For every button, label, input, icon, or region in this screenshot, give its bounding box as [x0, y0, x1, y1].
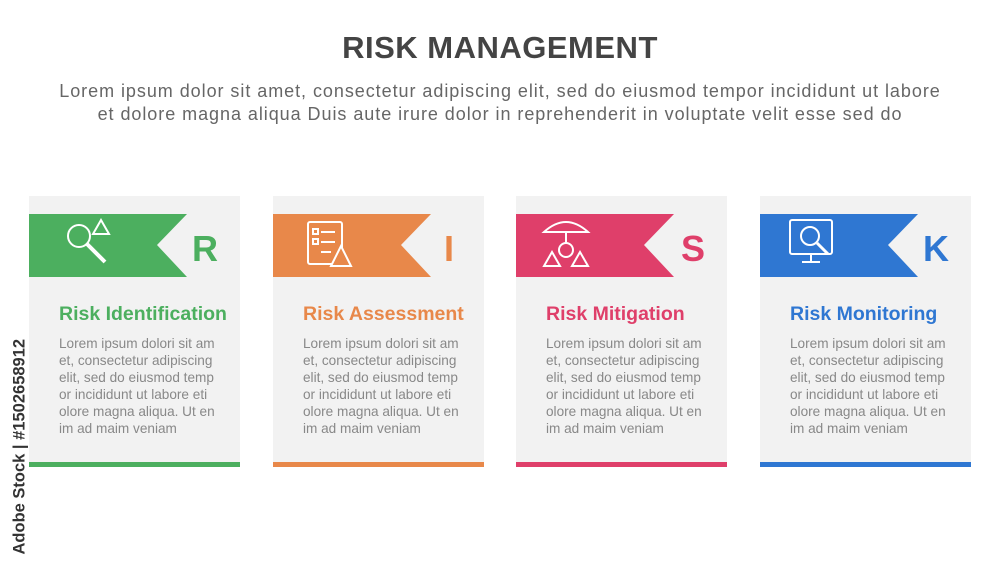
text: or incididunt ut labore eti [303, 387, 451, 402]
text: im ad maim veniam [59, 421, 177, 436]
letter: S [681, 228, 705, 269]
letter: R [192, 228, 218, 269]
text: or incididunt ut labore eti [790, 387, 938, 402]
text: elit, sed do eiusmod temp [790, 370, 945, 385]
subtitle [59, 81, 941, 124]
text: im ad maim veniam [790, 421, 908, 436]
banner [29, 214, 187, 277]
text: Lorem ipsum dolori sit am [303, 336, 459, 351]
banner [273, 214, 431, 277]
text [790, 336, 946, 436]
text: olore magna aliqua. Ut en [59, 404, 215, 419]
heading: Risk Monitoring [790, 303, 937, 325]
text: im ad maim veniam [303, 421, 421, 436]
subtitle: Lorem ipsum dolor sit amet, consectetur adipiscing elit, sed do eiusmod tempor incididunt ut labore [59, 81, 941, 101]
text: or incididunt ut labore eti [59, 387, 207, 402]
text: olore magna aliqua. Ut en [790, 404, 946, 419]
heading: Risk Identification [59, 303, 227, 325]
text: et, consectetur adipiscing [790, 353, 943, 368]
title: RISK MANAGEMENT [342, 30, 658, 65]
heading: Risk Assessment [303, 303, 464, 325]
text [546, 336, 702, 436]
banner [760, 214, 918, 277]
text: olore magna aliqua. Ut en [303, 404, 459, 419]
text [59, 336, 215, 436]
heading: Risk Mitigation [546, 303, 685, 325]
text: elit, sed do eiusmod temp [303, 370, 458, 385]
text: et, consectetur adipiscing [59, 353, 212, 368]
letter: I [444, 228, 454, 269]
text: Lorem ipsum dolori sit am [790, 336, 946, 351]
panel: I [273, 196, 484, 467]
text: or incididunt ut labore eti [546, 387, 694, 402]
watermark side text: Adobe Stock | #1502658912 [10, 339, 28, 554]
letter: K [923, 228, 949, 269]
subtitle: et dolore magna aliqua Duis aute irure dolor in reprehenderit in voluptate velit esse sed do [98, 104, 902, 124]
text: Lorem ipsum dolori sit am [546, 336, 702, 351]
panel: K [760, 196, 971, 467]
text: et, consectetur adipiscing [546, 353, 699, 368]
text [303, 336, 459, 436]
panel: R [29, 196, 240, 467]
text: et, consectetur adipiscing [303, 353, 456, 368]
panel: S [516, 196, 727, 467]
text: im ad maim veniam [546, 421, 664, 436]
text: elit, sed do eiusmod temp [59, 370, 214, 385]
banner [516, 214, 674, 277]
text: Lorem ipsum dolori sit am [59, 336, 215, 351]
text: olore magna aliqua. Ut en [546, 404, 702, 419]
text: elit, sed do eiusmod temp [546, 370, 701, 385]
